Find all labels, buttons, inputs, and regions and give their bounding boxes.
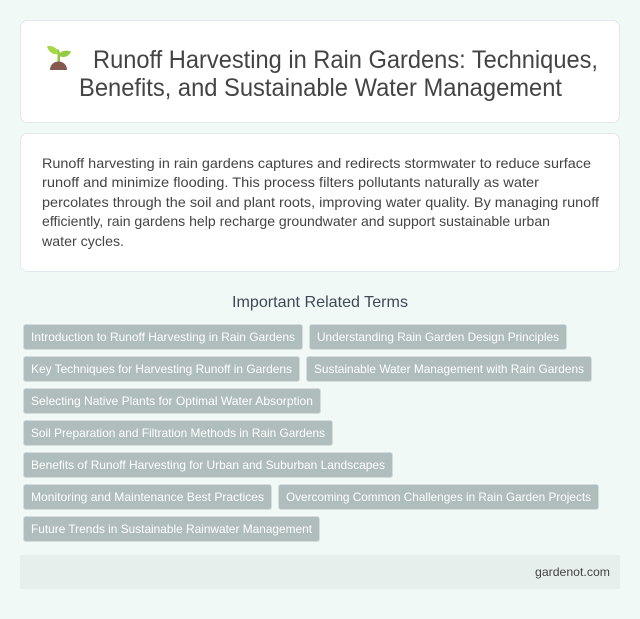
heading: title [79,46,598,102]
chip: sustainable water management: Sustainable Water Management with Rain Gardens [314,362,584,376]
chip: future trends [24,516,320,542]
footer: gardenot.com [535,565,610,579]
chip: soil preparation: Soil Preparation and Filtration Methods in Rain Gardens [31,426,325,440]
chip: sustainable water management [306,356,592,382]
chip: challenges [278,484,598,510]
text block: description: percolates through the soil and plant roots, improving water quality. By managing runoff [42,194,599,210]
chip: benefits: Benefits of Runoff Harvesting for Urban and Suburban Landscapes [31,458,385,472]
chip: introduction [24,324,302,350]
heading: important related terms: Important Related Terms [232,294,408,311]
panel: title card [20,20,620,122]
icon: seedling [47,46,71,70]
text block: description: water cycles. [41,233,124,249]
chip: design principles: Understanding Rain Garden Design Principles [317,330,559,344]
text block: description [41,155,599,249]
heading: title: Runoff Harvesting in Rain Gardens: Techniques, [93,46,598,74]
chip: benefits [24,452,392,478]
text block: description: efficiently, rain gardens help recharge groundwater and support sustainable urban [42,213,550,229]
text block: description: Runoff harvesting in rain gardens captures and redirects stormwater to reduce surface [42,155,591,171]
panel: related term chips [24,324,598,542]
chip: challenges: Overcoming Common Challenges in Rain Garden Projects [286,490,591,504]
heading: title: Benefits, and Sustainable Water Management [79,74,562,102]
panel: description card [20,134,620,272]
chip: monitoring [24,484,272,510]
chip: introduction: Introduction to Runoff Harvesting in Rain Gardens [31,330,295,344]
chip: future trends: Future Trends in Sustainable Rainwater Management [31,522,313,536]
chip: native plants: Selecting Native Plants for Optimal Water Absorption [31,394,313,408]
chip: design principles [310,324,566,350]
chip: key techniques: Key Techniques for Harvesting Runoff in Gardens [31,362,292,376]
chip: monitoring: Monitoring and Maintenance Best Practices [31,490,264,504]
chip: native plants [24,388,320,414]
chip: soil preparation [24,420,332,446]
text block: description: runoff and minimize flooding. This process filters pollutants naturally as water [42,174,539,190]
footer [20,555,620,589]
chip: key techniques [24,356,300,382]
